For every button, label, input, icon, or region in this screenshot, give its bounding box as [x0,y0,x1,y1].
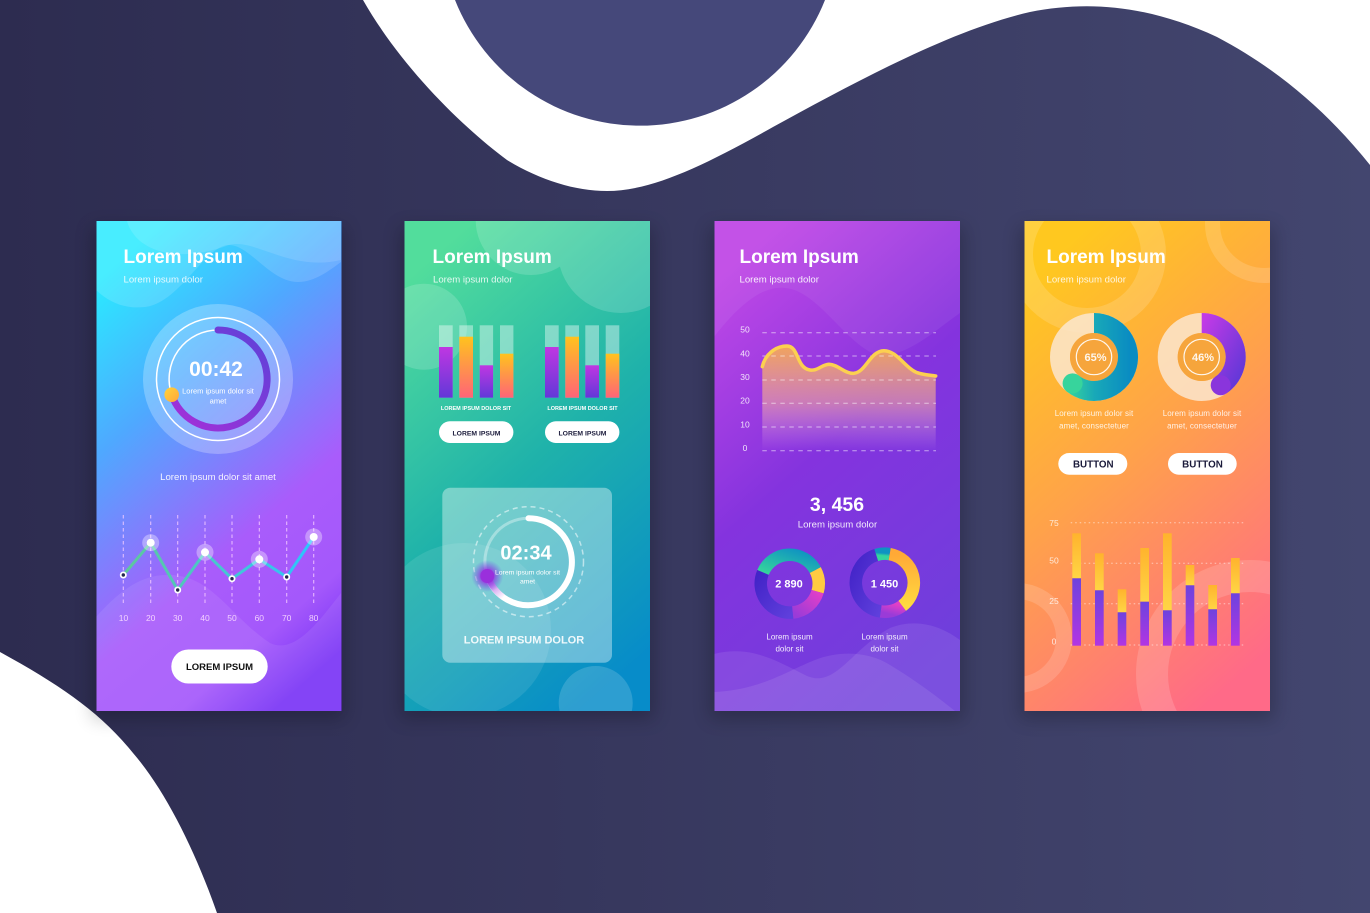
heading: Lorem Ipsum [1046,247,1166,268]
donut right: 1 450 [871,578,898,590]
button right: LOREM IPSUM [559,430,607,438]
total number: 3, 456 [810,494,864,516]
ring captions: Lorem ipsum dolor sit [1163,409,1242,418]
bar group left: LOREM IPSUM DOLOR SIT [441,406,512,412]
ring captions: amet, consectetuer [1167,422,1237,430]
line chart: 50 [227,613,237,623]
panel: progress rings and stacked bars [1024,221,1270,711]
stacked bar chart: 75 [1049,518,1059,528]
subheading: Lorem ipsum dolor [740,274,820,286]
stacked bar chart [1049,518,1244,646]
donut captions [766,632,908,654]
subheading: Lorem ipsum dolor [124,274,204,286]
timer card: amet [520,578,535,586]
line chart: 70 [282,613,292,623]
heading: Lorem Ipsum [432,247,552,268]
timer gauge: amet [210,396,227,406]
heading: Lorem Ipsum [124,247,243,268]
timer card: 02:34 [500,542,552,564]
donut captions: Lorem ipsum [766,632,813,642]
button right [545,421,619,443]
line chart: 10 [119,613,128,623]
top semicircle [455,0,825,126]
caption: Lorem ipsum dolor sit amet [160,472,276,483]
ring captions: Lorem ipsum dolor sit [1055,409,1134,418]
subheading: Lorem ipsum dolor [1046,274,1127,286]
panel shadows [92,227,1274,719]
panel: timer and line chart [96,221,342,711]
panel 4 background rings [1024,221,1270,711]
bar group right [545,325,619,412]
timer card: Lorem ipsum dolor sit [495,570,560,576]
timer card: LOREM IPSUM DOLOR [464,634,584,646]
line chart [119,515,322,623]
line chart: 60 [255,613,264,623]
area chart: 10 [740,419,750,429]
donut right [856,554,914,612]
timer gauge: 00:42 [189,358,243,381]
panel 3 background waves [714,221,960,711]
button left [439,421,513,443]
line chart: 20 [146,613,156,623]
area chart: 0 [743,443,748,453]
button left: BUTTON [1073,460,1114,470]
line chart: 80 [309,613,319,623]
subheading: Lorem ipsum dolor [433,274,513,286]
area chart: 20 [740,396,750,406]
area chart [740,325,936,453]
panel: bars and timer card [377,165,684,740]
button left [1058,453,1127,475]
area chart: 30 [740,372,750,382]
timer gauge [143,304,293,454]
button left: LOREM IPSUM [453,430,501,438]
button: LOREM IPSUM [186,662,253,673]
progress ring 46% [1168,323,1236,395]
total caption: Lorem ipsum dolor [798,520,878,530]
donut captions: dolor sit [775,644,804,654]
button right [1168,453,1237,475]
panel 1 background waves [96,221,341,711]
bar group right: LOREM IPSUM DOLOR SIT [547,406,618,412]
donut captions: Lorem ipsum [861,632,908,642]
timer card [442,488,612,663]
stacked bar chart: 25 [1049,596,1059,606]
area chart: 40 [740,348,750,358]
progress ring 65%: 65% [1084,352,1107,364]
ring captions [1055,409,1242,430]
button right: BUTTON [1182,460,1223,470]
panel: area chart and donuts [714,221,960,711]
timer gauge: Lorem ipsum dolor sit [182,386,255,396]
donut captions: dolor sit [870,644,899,654]
area chart: 50 [740,325,750,335]
button [171,650,268,684]
stacked bar chart: 0 [1052,636,1057,646]
donut left: 2 890 [775,578,803,590]
progress ring 65% [1060,323,1128,393]
bar group left [439,325,513,412]
panel 2 background circles [404,221,650,711]
progress ring 46%: 46% [1192,352,1214,364]
line chart: 30 [173,613,183,623]
heading: Lorem Ipsum [740,247,859,268]
donut left [761,555,819,613]
line chart: 40 [200,613,210,623]
stacked bar chart: 50 [1049,556,1059,566]
ring captions: amet, consectetuer [1059,422,1129,430]
